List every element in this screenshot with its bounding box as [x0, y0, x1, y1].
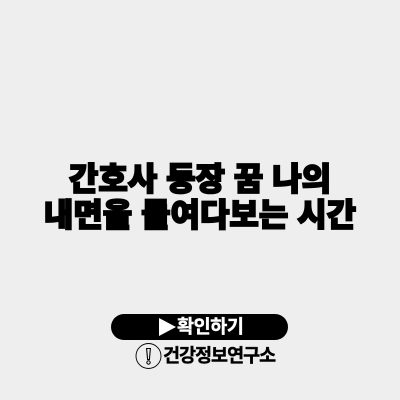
brand logo [136, 343, 276, 369]
title: 내면을 들여다보는 시간 [44, 197, 356, 233]
title: 간호사 등장 꿈 나의 [69, 161, 331, 197]
icon: play triangle [159, 318, 176, 336]
brand name: 건강정보연구소 [163, 345, 275, 366]
title [44, 161, 356, 233]
icon: exclamation circle [136, 343, 162, 369]
button: confirm [111, 314, 288, 340]
button label: 확인하기 [177, 316, 243, 337]
